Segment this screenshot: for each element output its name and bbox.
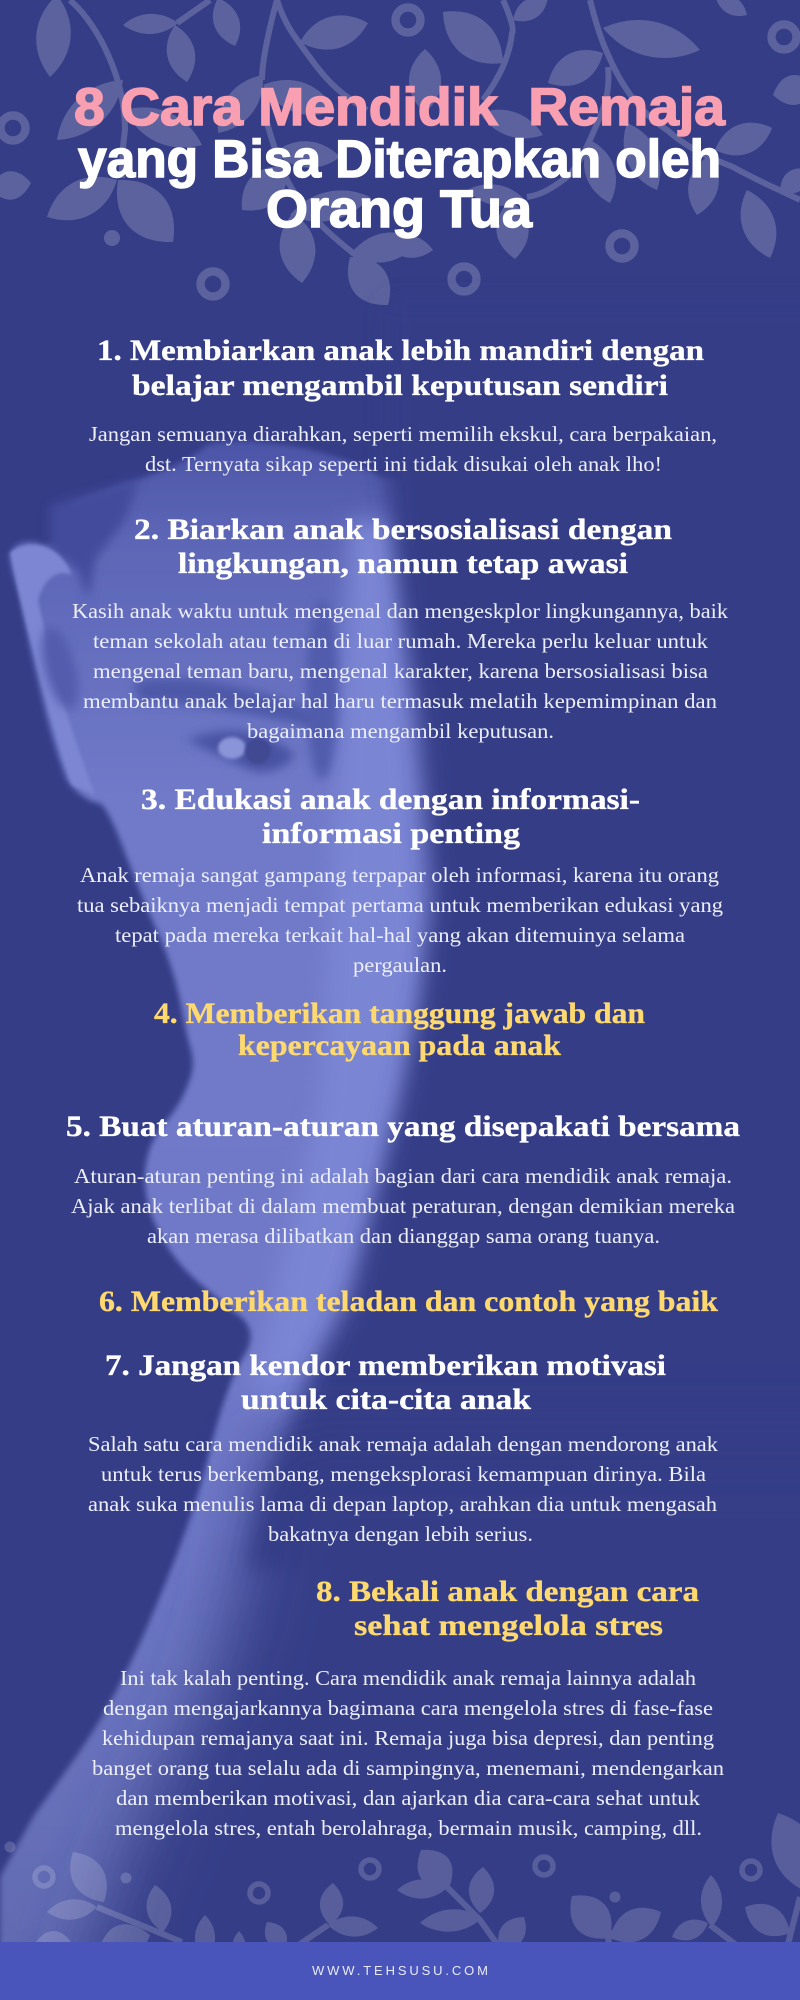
text block 8: Ini tak kalah penting. Cara mendidik anak remaja lainnya adalah bbox=[120, 1666, 697, 1690]
title: 8 Cara Mendidik Remaja bbox=[74, 78, 726, 137]
photo detail: eye bbox=[187, 731, 295, 772]
text block 8: dan memberikan motivasi, dan ajarkan dia cara-cara sehat untuk bbox=[116, 1786, 701, 1810]
text block 8: banget orang tua selalu ada di sampingnya, menemani, mendengarkan bbox=[92, 1756, 725, 1780]
text block 5: Ajak anak terlibat di dalam membuat peraturan, dengan demikian mereka bbox=[71, 1194, 736, 1218]
title bbox=[74, 78, 726, 239]
text block 7 bbox=[88, 1432, 719, 1546]
text block 3: tepat pada mereka terkait hal-hal yang akan ditemuinya selama bbox=[115, 923, 686, 947]
heading 3 bbox=[141, 783, 640, 850]
heading 5: 5. Buat aturan-aturan yang disepakati bersama bbox=[66, 1110, 740, 1143]
section 4 heading bbox=[154, 997, 645, 1062]
text block 5: akan merasa dilibatkan dan dianggap sama orang tuanya. bbox=[147, 1224, 660, 1248]
text block 8: dengan mengajarkannya bagimana cara mengelola stres di fase-fase bbox=[103, 1696, 713, 1720]
text block 2: mengenal teman baru, mengenal karakter, karena bersosialisasi bisa bbox=[93, 659, 709, 683]
section 5 bbox=[66, 1110, 740, 1248]
title: yang Bisa Diterapkan oleh bbox=[78, 130, 721, 189]
photo overlay: right side falloff lower bbox=[50, 1440, 800, 2000]
photo detail: sideburn hair bbox=[50, 478, 140, 600]
text block 2 bbox=[72, 599, 729, 743]
text block 5: Aturan-aturan penting ini adalah bagian dari cara mendidik anak remaja. bbox=[74, 1164, 732, 1188]
text block 1: Jangan semuanya diarahkan, seperti memilih ekskul, cara berpakaian, bbox=[89, 422, 717, 446]
text block 7: untuk terus berkembang, mengeksplorasi kemampuan dirinya. Bila bbox=[101, 1462, 707, 1486]
heading 8: sehat mengelola stres bbox=[354, 1609, 663, 1642]
text block 3: Anak remaja sangat gampang terpapar oleh informasi, karena itu orang bbox=[80, 863, 720, 887]
text block 8: kehidupan remajanya saat ini. Remaja juga bisa depresi, dan penting bbox=[102, 1726, 715, 1750]
text block 8 bbox=[92, 1666, 725, 1840]
text block 3 bbox=[77, 863, 724, 977]
text block 2: bagaimana mengambil keputusan. bbox=[247, 719, 554, 743]
heading 8: 8. Bekali anak dengan cara bbox=[316, 1575, 699, 1608]
text block 2: Kasih anak waktu untuk mengenal dan mengeskplor lingkungannya, baik bbox=[72, 599, 729, 623]
text block 1 bbox=[89, 422, 717, 476]
text block 8: mengelola stres, entah berolahraga, bermain musik, camping, dll. bbox=[115, 1816, 702, 1840]
photo detail: hand shadow bbox=[306, 600, 338, 780]
section 2 bbox=[72, 513, 729, 743]
footer band bbox=[0, 1942, 800, 2000]
section 7 bbox=[88, 1349, 719, 1546]
text block 3: tua sebaiknya menjadi tempat pertama untuk memberikan edukasi yang bbox=[77, 893, 724, 917]
text block 7: bakatnya dengan lebih serius. bbox=[268, 1522, 533, 1546]
section 3 bbox=[77, 783, 724, 977]
text block 1: dst. Ternyata sikap seperti ini tidak disukai oleh anak lho! bbox=[145, 452, 662, 476]
photo overlay: right side falloff upper bbox=[248, 300, 800, 1570]
text block 3: pergaulan. bbox=[353, 953, 447, 977]
heading 7: 7. Jangan kendor memberikan motivasi bbox=[105, 1349, 666, 1382]
photo detail: ear bbox=[10, 545, 95, 795]
text block 7: anak suka menulis lama di depan laptop, arahkan dia untuk mengasah bbox=[88, 1492, 718, 1516]
text block 2: teman sekolah atau teman di luar rumah. Mereka perlu keluar untuk bbox=[93, 629, 709, 653]
text block 7: Salah satu cara mendidik anak remaja adalah dengan mendorong anak bbox=[88, 1432, 719, 1456]
section 1 bbox=[89, 334, 717, 476]
heading 1 bbox=[97, 334, 704, 402]
heading 1: 1. Membiarkan anak lebih mandiri dengan bbox=[97, 334, 704, 367]
section 4 heading: 4. Memberikan tanggung jawab dan bbox=[154, 997, 645, 1030]
heading 2 bbox=[134, 513, 672, 580]
heading 8 bbox=[316, 1575, 699, 1642]
title: Orang Tua bbox=[266, 180, 533, 239]
heading 2: 2. Biarkan anak bersosialisasi dengan bbox=[134, 513, 672, 546]
heading 2: lingkungan, namun tetap awasi bbox=[178, 547, 628, 580]
text block 5 bbox=[71, 1164, 736, 1248]
heading 1: belajar mengambil keputusan sendiri bbox=[132, 369, 668, 402]
section 6 heading: 6. Memberikan teladan dan contoh yang baik bbox=[99, 1285, 718, 1318]
heading 7 bbox=[105, 1349, 666, 1416]
leaf decoration: top bbox=[0, 0, 800, 317]
heading 3: 3. Edukasi anak dengan informasi- bbox=[141, 783, 640, 816]
section 4 heading: kepercayaan pada anak bbox=[238, 1029, 561, 1062]
text block 2: membantu anak belajar hal haru termasuk melatih kepemimpinan dan bbox=[83, 689, 718, 713]
section 8 bbox=[92, 1575, 725, 1840]
footer url: WWW.TEHSUSU.COM bbox=[312, 1963, 488, 1978]
heading 3: informasi penting bbox=[262, 817, 520, 850]
photo detail: eyebrow bbox=[133, 678, 315, 727]
leaf decoration: bottom bbox=[4, 1804, 800, 1963]
heading 7: untuk cita-cita anak bbox=[241, 1383, 531, 1416]
